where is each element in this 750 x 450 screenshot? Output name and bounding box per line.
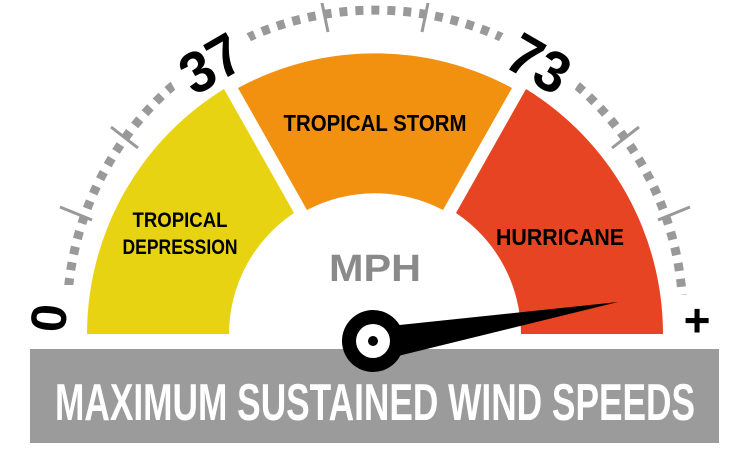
label: 73: 73: [496, 21, 582, 108]
segment: hurricane: HURRICANE: [496, 224, 624, 250]
white masks behind numbers: [20, 7, 720, 340]
label: plus: +: [684, 294, 710, 346]
segment: tropical depression: DEPRESSION: [122, 236, 238, 259]
segment: tropical depression: [87, 89, 294, 334]
dashed tick arc: [67, 10, 683, 318]
label: 37: 37: [168, 21, 254, 108]
MPH label: MPH: [329, 248, 421, 290]
segment: tropical depression: TROPICAL: [132, 209, 228, 232]
segment: hurricane: [456, 89, 663, 334]
segment: tropical storm: [238, 53, 512, 210]
label: 0: 0: [20, 302, 78, 334]
needle: [342, 302, 618, 372]
bottom banner: [30, 349, 719, 443]
segment: tropical storm: TROPICAL STORM: [284, 110, 466, 136]
long ticks: [60, 3, 690, 220]
